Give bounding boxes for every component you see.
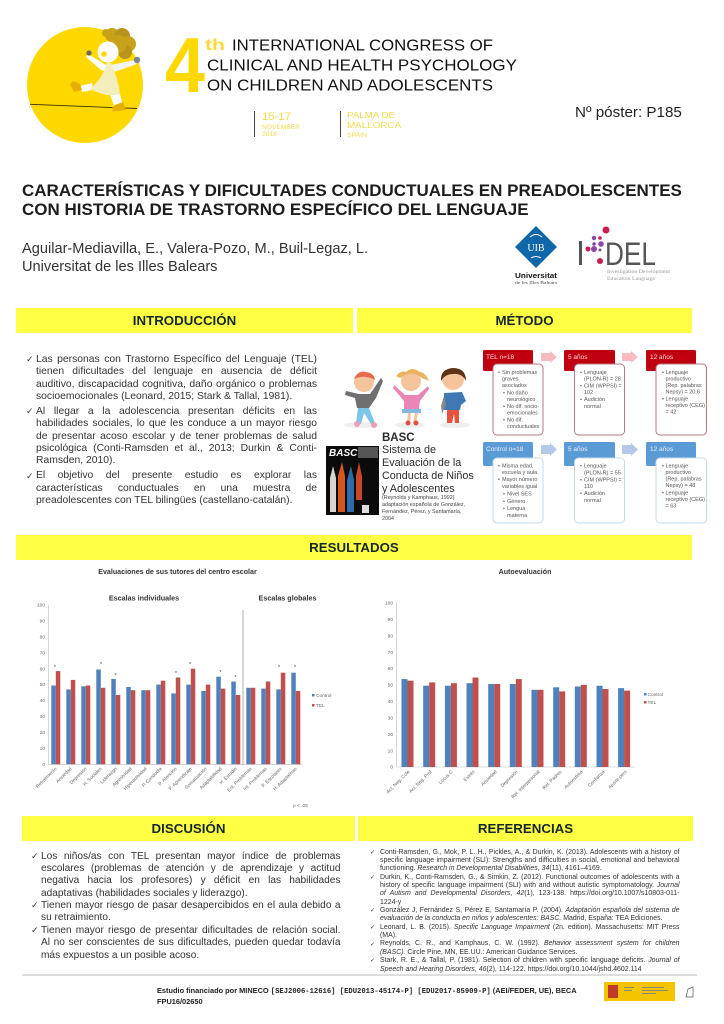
text block: congress dates and place: 2018 — [262, 131, 277, 138]
bar chart: teacher evaluations: Somatización — [184, 766, 209, 791]
text block: references: (BASC). Circle Pine, MN, EE.UU.: American Guidance Services. — [380, 949, 577, 956]
row: Control group: • — [498, 464, 500, 470]
bar chart: self evaluation: Control — [648, 692, 663, 698]
text block: funding — [157, 986, 577, 1006]
text block: discussion: Tienen mayor riesgo de pasar desapercibidos en el aula debido a — [41, 900, 340, 911]
text block: discussion: ✓ — [31, 852, 39, 862]
text block: discussion: Los niños/as con TEL presentan mayor índice de problemas — [41, 850, 340, 862]
bar chart: self evaluation: Ajuste pers — [607, 769, 629, 790]
text block: BASC description: Conducta de Niños — [382, 470, 474, 482]
logo: Universitat de les Illes Balears: UIB — [527, 243, 545, 254]
icon: congress logo with child on tightrope — [27, 27, 143, 143]
text block: references: of Autism and Developmental Disorders, 42(1), 123-138. https://doi.org/10.1007/s10803-011- — [380, 890, 680, 897]
text block: references: specific language impairment (SLI): Strengths and difficulties in social, emotional and behavioral — [380, 857, 680, 864]
authors and affiliation: Universitat de les Illes Balears — [22, 259, 217, 275]
bar chart: self evaluation: Depresión — [500, 769, 520, 789]
bar chart: self evaluation: Ansiedad — [480, 769, 499, 788]
text block: references: Conti-Ramsden, G., Mok, P. L. H., Pickles, A., & Durkin, K. (2013). Adolescents with a history of — [380, 848, 680, 856]
bar chart: teacher evaluations: * — [189, 662, 192, 668]
chart heading: self evaluation: Autoevaluación — [499, 568, 551, 576]
row: TEL group: • — [580, 370, 582, 376]
row: TEL group: (Rep. palabras — [666, 383, 702, 389]
text block: references: ✓ — [370, 924, 375, 930]
row: Control group — [483, 442, 706, 523]
text block: introduction: ✓ — [26, 407, 34, 417]
bar chart: self evaluation: Rel. Padres — [541, 769, 564, 791]
row: Control group: Lenguaje — [666, 490, 688, 496]
bar chart: teacher evaluations: Depresión — [69, 766, 89, 786]
text block: discussion: adaptativas (habilidades sociales y liderazgo). — [41, 888, 248, 899]
heading: Referencias — [358, 816, 693, 841]
bar chart: self evaluation: 90 — [388, 617, 393, 623]
bar chart: self evaluation: 20 — [388, 732, 393, 738]
bar chart: self evaluation: 50 — [388, 683, 393, 689]
row: TEL group: receptivo (CEG) — [666, 403, 705, 409]
row: TEL group: Lenguaje — [666, 396, 688, 402]
heading: Discusión: DISCUSIÓN — [152, 821, 225, 836]
row: Control group: escuela y aula. — [502, 470, 539, 476]
text block: introduction — [26, 354, 317, 506]
row: Control group: 12 años — [650, 446, 674, 453]
row: TEL group: Nepsy) = 20,6 — [666, 390, 700, 396]
heading: Discusión — [22, 816, 355, 841]
text block: discussion: Tienen mayor riesgo de presentar dificultades de relación social. — [41, 925, 340, 936]
text block: introduction: habilidades sociales, lo que les conduce a un mayor riesgo — [36, 418, 317, 429]
text block: references: ✓ — [370, 940, 375, 948]
row: Control group: variables igual — [502, 484, 537, 490]
bar chart: teacher evaluations: TEL — [316, 703, 325, 709]
row: TEL group: normal — [584, 404, 601, 410]
logo: Universitat de les Illes Balears: Universitat — [515, 271, 558, 280]
row: Control group: Género — [507, 499, 525, 505]
text block: discussion: negativa hacia los profesores) y déficit en las habilidades — [41, 875, 340, 886]
text block: discussion: más expuestos a un posible acoso. — [41, 950, 199, 960]
logo: I+DEL: Education Language — [607, 277, 656, 282]
text block: references: Durkin, K., Conti-Ramsden, G., & Simkin, Z. (2012). Functional outcomes of adolescents with a — [380, 874, 680, 881]
text block: references: evaluación de la conducta en niños y adolescentes: BASC. Madrid, España: TEA Ediciones. — [380, 915, 663, 922]
bar chart: self evaluation: 40 — [388, 699, 393, 705]
text block: BASC description — [382, 432, 474, 522]
text block: introduction: Ramsden, 2010). — [36, 455, 115, 466]
bar chart: self evaluation: 0 — [390, 765, 393, 771]
text block: references: González J, Fernández S, Pérez E, Santamaría P. (2004). Adaptación española del sistema de — [380, 907, 680, 914]
row: TEL group: 12 años — [650, 354, 674, 361]
bar chart: self evaluation: 30 — [388, 716, 393, 722]
text block: references: (MA). — [380, 932, 397, 939]
bar chart: self evaluation: Rel. Interpersonal — [510, 769, 541, 800]
bar chart: teacher evaluations: P. Aprendizaje — [168, 766, 194, 792]
bar chart: teacher evaluations: * — [175, 671, 178, 677]
row: TEL group: • — [503, 418, 505, 424]
row: Control group: • — [580, 478, 582, 484]
bar chart: teacher evaluations: p < .05 — [292, 803, 308, 809]
row: Control group: • — [503, 506, 505, 512]
text block: congress dates and place: NOVEMBER — [262, 124, 300, 131]
heading: Resultados: RESULTADOS — [309, 540, 399, 555]
bar chart: teacher evaluations: 100 — [37, 602, 45, 608]
logo: Universitat de les Illes Balears — [515, 226, 558, 285]
row: TEL group: emocionales — [507, 410, 538, 416]
bar chart: teacher evaluations: H. Estudio — [219, 766, 239, 786]
row: TEL group: • — [580, 397, 582, 403]
text block: references: Stark, R. E., & Tallal, P. (1981). Selection of children with specific language deficits. Journal of — [380, 957, 680, 964]
text block: discussion — [31, 850, 340, 960]
text block: references: Speech and Hearing Disorders, 46(2), 114-122. https://doi.org/10.1044/jshd.4602.114 — [380, 966, 642, 973]
bar chart: self evaluation: Confianza — [587, 769, 607, 789]
row: Control group: • — [498, 477, 500, 483]
row: Control group: • — [503, 499, 505, 505]
bar chart: self evaluation: 70 — [388, 650, 393, 656]
text block: congress dates and place: 15-17 — [262, 111, 291, 123]
row: Control group: • — [662, 490, 664, 496]
heading: Referencias: REFERENCIAS — [478, 821, 573, 836]
row: TEL group: No daño — [507, 390, 528, 396]
row: Control group: Audición — [584, 491, 605, 497]
text block: discussion: ✓ — [31, 901, 39, 911]
bar chart: teacher evaluations: 20 — [40, 730, 45, 736]
row: Control group: (PLON-R) = 55 — [584, 470, 621, 476]
bar chart: self evaluation: TEL — [648, 700, 657, 706]
row: Control group: 110 — [584, 484, 593, 490]
row: Control group: Lengua — [507, 506, 526, 512]
row: Control group: CIM (WPPSI) = — [584, 478, 622, 484]
bar chart: teacher evaluations: Adaptabilidad — [199, 766, 224, 791]
bar chart: teacher evaluations: P. Conducta — [141, 766, 164, 789]
authors and affiliation: Aguilar-Mediavilla, E., Valera-Pozo, M., Buil-Legaz, L. — [22, 241, 368, 257]
text block: references: Leonard, L. B. (2015). Specific Language Impairment (2n. edition). Massachusetts: MIT Press — [380, 924, 679, 931]
text block: congress dates and place — [254, 110, 401, 139]
row: TEL group: TEL n=18 — [486, 354, 515, 361]
row: Control group: Lenguaje — [584, 464, 607, 470]
image: BASC manual cover: BASC — [329, 448, 358, 459]
logo: I+DEL: DEL — [605, 236, 656, 272]
text block: BASC description: Fernández, Pérez, y Santamaría, — [382, 509, 461, 515]
text block: discussion: Al no ser conscientes de sus dificultades, pueden quedar todavía — [41, 937, 340, 948]
bar chart: self evaluation: Act. Neg. Cole — [385, 769, 412, 795]
row: Control group: Misma edad, — [502, 464, 534, 470]
row: TEL group: • — [662, 370, 664, 376]
bar chart: teacher evaluations: Escalas individuales — [109, 594, 179, 602]
row: TEL group: Lenguaje — [584, 370, 607, 376]
text block: BASC description: adaptación española de González, — [382, 502, 465, 508]
text block: BASC description: Sistema de — [382, 444, 436, 456]
row: TEL group: • — [503, 404, 505, 410]
text block: congress dates and place: PALMA DE — [347, 110, 395, 120]
text block: introduction: ✓ — [26, 355, 34, 365]
bar chart: teacher evaluations: 90 — [40, 618, 45, 624]
bar chart: self evaluation: Locus C — [438, 769, 455, 786]
text block: references: ✓ — [370, 848, 375, 856]
bar chart: teacher evaluations: Agresividad — [111, 766, 134, 788]
row: Control group: • — [662, 464, 664, 470]
bar chart: teacher evaluations: H. Adaptativas — [272, 766, 299, 792]
heading: congress name: INTERNATIONAL CONGRESS OF — [232, 38, 493, 54]
row: Control group: Nepsy) = 48 — [666, 483, 695, 489]
bar chart: self evaluation: Act. Neg. Prof — [408, 769, 434, 795]
row: Control group: Lenguaje — [666, 464, 688, 470]
text block: BASC description: (Reynolds y Kamphaus, 1992) — [382, 495, 455, 501]
row: TEL group: Sin problemas — [502, 370, 537, 376]
bar chart: teacher evaluations: 50 — [40, 682, 45, 688]
row: TEL group: graves — [502, 376, 519, 382]
row: Control group: receptivo (CEG) — [666, 497, 705, 503]
text block: BASC description: Evaluación de la — [382, 457, 461, 469]
row: TEL group: No dif. socio- — [507, 404, 539, 410]
bar chart: teacher evaluations: P. Atención — [157, 766, 179, 787]
bar chart: teacher evaluations: * — [234, 675, 237, 681]
logo: Universitat de les Illes Balears: de les Illes Balears — [515, 280, 557, 285]
bar chart: teacher evaluations: Est. Problemas — [226, 766, 254, 793]
bar chart: teacher evaluations: P. Escolares — [261, 766, 284, 789]
flow diagram: study groups — [483, 350, 707, 524]
bar chart: teacher evaluations: 0 — [42, 762, 45, 768]
text block: discussion: ✓ — [31, 926, 39, 936]
text block: introduction: Las personas con Trastorno Específico del Lenguaje (TEL) — [36, 354, 317, 365]
row: Control group: • — [580, 464, 582, 470]
text block: discussion: su retraimiento. — [41, 912, 111, 923]
row: Control group: Mayor número — [502, 477, 537, 483]
poster number: Nº póster: P185 — [575, 104, 682, 121]
row: Control group: • — [503, 492, 505, 498]
bar chart: teacher evaluations: H. Sociales — [82, 766, 104, 788]
row: Control group: normal — [584, 498, 601, 504]
text block: funding: Estudio financiado por MINECO [SEJ2006-12616] [EDU2013-45174-P] [EDU2017-85909-P] (AEI/FEDER, UE), BECA — [157, 986, 577, 996]
text block: BASC description: y Adolescentes — [382, 483, 455, 495]
logo: I+DEL: Investigation Development — [607, 270, 671, 275]
text block: introduction: Al llegar a la adolescencia presentan déficits en las — [36, 406, 317, 417]
title: CON HISTORIA DE TRASTORNO ESPECÍFICO DEL LENGUAJE — [22, 200, 529, 219]
bar chart: teacher evaluations: Liderazgo — [99, 766, 119, 785]
row: TEL group: Audición — [584, 397, 605, 403]
text block: references: ✓ — [370, 874, 375, 880]
heading: congress name — [165, 21, 517, 109]
heading: congress name: 4 — [165, 21, 205, 109]
row: TEL group: • — [503, 390, 505, 396]
text block: discussion: escolares (problemas de atención y de aprendizaje y actitud — [41, 863, 340, 874]
row: Control group: Control n=18 — [486, 446, 524, 453]
row: Control group: productivo — [666, 470, 691, 476]
bar chart: self evaluation — [385, 600, 663, 800]
bar chart: teacher evaluations: 40 — [40, 698, 45, 704]
bar chart: teacher evaluations: 30 — [40, 714, 45, 720]
row: TEL group: CIM (WPPSI) = — [584, 384, 622, 390]
bar chart: teacher evaluations: * — [100, 662, 103, 668]
bar chart: teacher evaluations: * — [219, 670, 222, 676]
text block: introduction: socioemocionales (Leonard, 2015; Stark & Tallal, 1981). — [36, 391, 292, 402]
bar chart: teacher evaluations: * — [54, 665, 57, 671]
text block: BASC description: 2004 — [382, 516, 394, 522]
text block: references: ✓ — [370, 907, 375, 914]
text block: introduction: tienen dificultades del lenguaje en ausencia de déficit — [36, 366, 317, 377]
row: TEL group: asociados — [502, 383, 527, 389]
bar chart: teacher evaluations: 80 — [40, 634, 45, 640]
title — [22, 180, 682, 219]
text block: introduction: El objetivo del presente estudio es explorar las — [36, 470, 317, 481]
text block: references: history of specific language impairment (SLI) with and without autistic symptomatology. Journal — [380, 882, 680, 889]
row: TEL group: 102 — [584, 390, 593, 396]
text block: references: 1224-y — [380, 899, 401, 906]
bar chart: teacher evaluations: Int. Problemas — [242, 766, 269, 792]
bar chart: teacher evaluations: * — [114, 673, 117, 679]
row: TEL group: productivo — [666, 376, 691, 382]
bar chart: teacher evaluations: Ansiedad — [55, 766, 74, 785]
illustration: three cartoon children — [344, 368, 470, 428]
text block: BASC description: BASC — [382, 432, 415, 444]
row: TEL group: conductuales — [507, 424, 540, 430]
bar chart: teacher evaluations: 70 — [40, 650, 45, 656]
row: TEL group: (PLON-R) = 28 — [584, 376, 621, 382]
heading: Método: MÉTODO — [495, 313, 554, 328]
text block: congress dates and place: MALLORCA — [347, 120, 401, 130]
bar chart: teacher evaluations: * — [278, 665, 281, 671]
heading: Resultados — [16, 535, 692, 560]
text block: introduction: ✓ — [26, 472, 34, 482]
bar chart: self evaluation: Estrés — [463, 769, 477, 783]
bar chart: self evaluation: 60 — [388, 666, 393, 672]
heading: congress name: CLINICAL AND HEALTH PSYCHOLOGY — [207, 58, 517, 74]
text block: introduction: psicológica (Conti-Ramsden et al., 2013; Durkin & Conti- — [36, 443, 317, 454]
text block: introduction: características conductuales en una muestra de — [36, 483, 317, 494]
bar chart: teacher evaluations: Escalas globales — [259, 594, 316, 602]
bar chart: teacher evaluations: Hiperactividad — [123, 766, 149, 792]
row: Control group: (Rep. palabras — [666, 476, 702, 482]
text block: references: Reynolds, C. R., and Kamphaus, C. W. (1992). Behavior assessment system for children — [380, 940, 680, 947]
logo: I+DEL — [579, 226, 671, 282]
text block: introduction: preadolescentes con TEL bilingües (castellano-catalán). — [36, 495, 292, 506]
row: TEL group: • — [498, 370, 500, 376]
text block: introduction: auditivo, discapacidad cognitiva, daño orgánico o problemas — [36, 379, 317, 390]
bar chart: self evaluation: 100 — [385, 600, 393, 606]
heading: congress name: th — [205, 37, 225, 54]
bar chart: teacher evaluations: 10 — [40, 746, 45, 752]
bar chart: self evaluation: Autoestima — [563, 769, 585, 790]
text block: references: ✓ — [370, 957, 375, 964]
row: TEL group: Lenguaje — [666, 370, 688, 376]
row: TEL group: = 42 — [666, 410, 676, 416]
text block: references: functioning. Research in Developmental Disabilities, 34(11), 4161–4169. — [380, 865, 602, 872]
row: Control group: 5 años — [568, 446, 588, 453]
text block: funding: FPU16/02650 — [157, 997, 203, 1006]
bar chart: teacher evaluations: 60 — [40, 666, 45, 672]
text block: references — [370, 848, 680, 973]
bar chart: self evaluation: 80 — [388, 633, 393, 639]
bar chart: teacher evaluations: Retraimiento — [35, 766, 59, 790]
heading: Introducción: INTRODUCCIÓN — [133, 313, 236, 328]
row: TEL group: • — [580, 384, 582, 390]
row: TEL group: 5 años — [568, 354, 588, 361]
row: Control group: • — [580, 491, 582, 497]
title: CARACTERÍSTICAS Y DIFICULTADES CONDUCTUALES EN PREADOLESCENTES — [22, 180, 682, 200]
heading: congress name: ON CHILDREN AND ADOLESCENTS — [207, 78, 493, 94]
text block: introduction: de presentar acoso escolar y de tener problemas de salud — [36, 431, 317, 442]
text block: congress dates and place: SPAIN — [347, 133, 367, 139]
row: TEL group: • — [662, 396, 664, 402]
bar chart: self evaluation: 10 — [388, 748, 393, 754]
row: Control group: = 63 — [666, 504, 676, 510]
row: Control group: Nivel SES — [507, 492, 532, 498]
row: Control group: materna — [507, 513, 528, 519]
image: BASC manual cover — [326, 446, 379, 515]
row: TEL group: No dif. — [507, 418, 523, 424]
heading: Método — [357, 308, 692, 333]
bar chart: teacher evaluations: Control — [316, 693, 331, 699]
authors and affiliation — [22, 241, 368, 275]
heading: Introducción — [16, 308, 353, 333]
bar chart: teacher evaluations — [35, 594, 332, 809]
row: TEL group — [483, 350, 706, 435]
bar chart: teacher evaluations: * — [294, 665, 297, 671]
row: TEL group: neurológico — [507, 397, 535, 403]
chart heading: teacher evaluations: Evaluaciones de sus tutores del centro escolar — [98, 568, 257, 576]
